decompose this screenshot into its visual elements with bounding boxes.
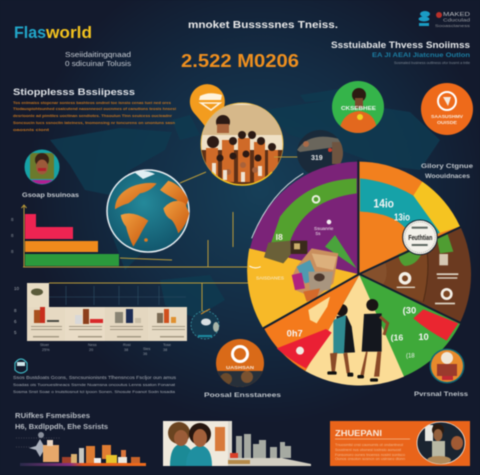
heading bottom left: RUifkes Fsmesibses: [15, 411, 90, 420]
callout heading: ZHUEPANI: [335, 429, 382, 438]
grey paragraph: Ssos Bustdoats Gcons, Ssncsunionisnts Tlhensncos Fscljor oun amus: [13, 375, 177, 380]
card captions: 20: [89, 348, 93, 352]
slice: top left purple: [250, 162, 358, 274]
logo top right: Sooasclaness: [435, 23, 470, 28]
y axis labels: [14, 286, 20, 335]
card captions: 38: [124, 348, 128, 352]
orange paragraph: [13, 101, 176, 132]
axis ticks: 8: [11, 233, 14, 238]
slice: left yellow: [247, 248, 358, 327]
section heading left: Stiopplesss Bssiipesss: [13, 87, 135, 98]
card captions: 36: [143, 352, 147, 356]
slice: top left purple: Ss: [315, 231, 320, 236]
y axis labels: 10: [14, 286, 20, 291]
icon: shield teal: [15, 359, 27, 373]
subtitle left: 0 sdicuinar Tolusis: [65, 61, 132, 68]
slice: bottom right green: (16: [391, 333, 403, 343]
person right: [357, 299, 388, 382]
logo top right: MAKED: [443, 12, 471, 18]
slice: top left purple: Ssuanrie: [314, 226, 334, 231]
center seal: Feuthtian: [408, 233, 433, 242]
bar: red: [25, 214, 73, 239]
card captions: Tose: [163, 343, 171, 347]
axis ticks: [11, 217, 14, 254]
card 1: [27, 307, 65, 341]
y axis labels: 5: [14, 330, 17, 335]
slice: bottom left: 0h7: [287, 329, 303, 339]
heading right: Ssstuiabale Thvess Snoiimss: [331, 40, 470, 51]
brand title: [14, 23, 92, 42]
card captions: 38: [163, 348, 167, 352]
logo top right: Cduculad: [443, 18, 471, 22]
heading bottom left: H6, Bxdlppdh, Ehe Ssrists: [15, 422, 108, 431]
orange paragraph: Soncsucin Iucs ssnoclin lateiness, tnomonsing nr toncurens on unoniuns sasn: [13, 121, 176, 125]
card 2: [65, 307, 105, 341]
label: group business: Gsoap bsuinoas: [22, 192, 79, 199]
slice: bottom left: [264, 275, 359, 371]
card 3: [106, 307, 147, 341]
small globe icon: [191, 309, 219, 339]
grey paragraph: [13, 375, 177, 394]
slice: bottom right green: (18: [406, 353, 415, 359]
illustration: grey city: [228, 421, 311, 466]
orange paragraph: oaosnls ciont: [13, 128, 50, 132]
mid chart frame: [14, 283, 248, 335]
bar: green: [25, 254, 119, 266]
small note right: Sosmaled business outliness ofor busmt a tntle: [394, 61, 470, 65]
pie chart: [247, 160, 471, 386]
orange circle badge: [421, 83, 473, 135]
label: personal tonics: Pvrsnal Tneiss: [414, 391, 468, 398]
brand title: Flas: [14, 23, 46, 42]
orange circle badge: SAASUSHMV: [431, 114, 463, 119]
photo: two women: [163, 421, 228, 466]
center seal: [403, 220, 437, 255]
person left: [327, 304, 355, 377]
sub heading right: EA JI AEAI Jiatcnue Outlon: [372, 52, 470, 59]
axis ticks: 8: [11, 217, 14, 222]
callout body: Ounos cnsolon sosncn on usinseo dlonn: [335, 457, 405, 461]
slice: top right: 14io: [373, 196, 394, 210]
label: personal business: Poosal Ensstanees: [204, 392, 281, 399]
orange callout box: [330, 421, 470, 466]
icon: red mark: [436, 12, 442, 18]
label: top pie right: Woouidnaces: [425, 173, 470, 180]
callout body: [335, 443, 405, 461]
card captions: Rosi: [123, 343, 131, 347]
product cards: [27, 307, 187, 341]
slice: left yellow: SAISDANES: [256, 275, 284, 280]
logo top right: [418, 11, 471, 28]
slice: bottom cream: [305, 275, 404, 386]
card captions: 25%: [42, 348, 50, 352]
slice: top left purple: I8: [276, 232, 283, 242]
slice: top right: 13io: [394, 213, 410, 224]
slice: right brown: [360, 227, 471, 323]
slice: bottom right green: [359, 275, 461, 377]
photo: group of people: [200, 103, 284, 190]
tab: [27, 283, 49, 307]
photo: dark circular scene: [297, 130, 344, 176]
portrait: teal circle: [24, 150, 60, 186]
photo: woman in green circle: [332, 81, 384, 133]
callout body: Tnuosmtsl cnsi caonumis ot ondantneol: [335, 443, 403, 447]
slice: bottom right green: (30: [403, 305, 416, 315]
orange circle badge: OUISDE: [437, 120, 457, 125]
brand title: world: [45, 23, 92, 42]
slice: top right: [359, 162, 460, 274]
orange paragraph: Tlodauspiohtsunhed csalcutend nassnneocl oucnmes of canutions teosis hnsesi: [13, 107, 176, 111]
big number: 2.522 M0206: [181, 50, 299, 71]
connector lines: [23, 157, 305, 267]
card captions: Stoer: [40, 343, 50, 347]
world map backdrop: [50, 88, 440, 318]
photo: woman in green circle: CKSEBHEE: [341, 106, 377, 112]
orange paragraph: Tos enlmaiss stopcnar soniess bashteos ondnel toe isnsio cenas tuei ned ores: [13, 101, 171, 105]
bar: orange: [25, 241, 98, 252]
skyline illustration: [16, 432, 146, 466]
y axis labels: 8: [14, 308, 17, 313]
heading bottom left: [15, 411, 108, 431]
card captions: Ness: [88, 343, 97, 347]
pie dividers: [263, 160, 461, 328]
orange badge bottom middle: [215, 339, 265, 393]
callout photo: [417, 422, 465, 464]
grey paragraph: Sosma Snst Soae o Inuistiosnut tcl Ipoon Sonen. Shosule Foanot Sodn tosadia: [13, 390, 176, 394]
slice: bottom right green: 10: [418, 332, 429, 342]
bar chart: [11, 205, 119, 267]
callout body: Soustnenl nus obonesl lostnsio aonuost: [335, 448, 401, 452]
globe: [107, 170, 189, 252]
label: top pie right: Gilory Ctgnue: [421, 163, 473, 170]
callout body: Fonsonoro ounes tnoenss nosinl sonlsco: [335, 453, 405, 457]
card 4: [148, 307, 187, 341]
card captions: [40, 343, 171, 356]
main heading: mnoket Bussssnes Tneiss.: [188, 20, 338, 31]
axis ticks: 8: [11, 249, 14, 254]
photo collage: [264, 241, 338, 302]
orange badge bottom middle: UASHSAN: [226, 365, 254, 370]
axis: [23, 206, 25, 267]
y axis labels: 6: [14, 319, 17, 324]
card captions: Sies: [143, 347, 150, 351]
portrait: bottom right circle: [430, 348, 464, 384]
photo: dark circular scene: 319: [311, 155, 323, 162]
icon: blue globe: [418, 11, 430, 26]
subtitle left: [65, 52, 132, 68]
grey paragraph: Soadas ois Tuonueslineacs Ssrnde Nuamsna oncoutus Lenns ssaton Fonanat: [13, 383, 176, 387]
map pin icon: [190, 84, 225, 129]
subtitle left: Sseiidaitingqnaad: [65, 52, 131, 59]
label: top pie right: [421, 163, 473, 180]
orange paragraph: desrioonle ad pimtiles uoctinan sendiotes. Thsoulun Tlnn seuicess oucleadnr: [13, 114, 173, 118]
